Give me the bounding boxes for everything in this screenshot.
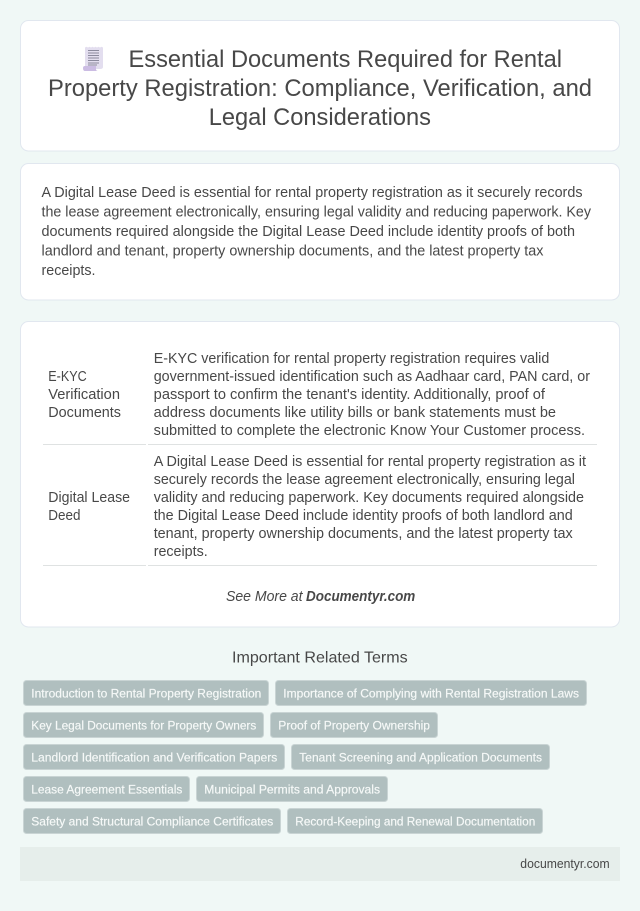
title: Property Registration: Compliance, Verification, and bbox=[48, 75, 592, 102]
tag bbox=[24, 808, 280, 834]
intro text bbox=[42, 185, 592, 279]
row text: E-KYC bbox=[154, 351, 590, 439]
tag: Introduction to Rental Property Registration bbox=[31, 686, 261, 700]
row label: E-KYC bbox=[48, 369, 121, 421]
table row: E-KYC verification documents bbox=[43, 351, 597, 445]
icon: document scroll bbox=[83, 47, 103, 71]
tag: Landlord Identification and Verification Papers bbox=[31, 750, 277, 764]
tag bbox=[24, 776, 190, 802]
row text: Digital Lease Deed: the Digital Lease Deed include identity proofs of both landlord and bbox=[154, 508, 573, 524]
row text: Digital Lease Deed: validity and reducing paperwork. Key documents required alongside bbox=[154, 490, 584, 506]
row text: E-KYC: address documents like utility bills or bank statements must be bbox=[154, 405, 556, 421]
intro text: documents required alongside the Digital Lease Deed include identity proofs of both bbox=[42, 224, 575, 240]
row label: Digital Lease Deed: Digital Lease bbox=[48, 490, 130, 506]
table row: digital lease deed bbox=[43, 454, 597, 566]
title bbox=[48, 46, 592, 131]
row text: Digital Lease Deed: receipts. bbox=[154, 544, 208, 560]
row text: E-KYC: E-KYC verification for rental property registration requires valid bbox=[154, 351, 549, 367]
title: Legal Considerations bbox=[209, 104, 431, 131]
footer bar bbox=[20, 847, 620, 881]
intro text: the lease agreement electronically, ensuring legal validity and reducing paperwork. Key bbox=[42, 204, 592, 220]
row text: E-KYC: passport to confirm the tenant's identity. Additionally, proof of bbox=[154, 387, 546, 403]
row label: Digital Lease Deed bbox=[48, 490, 130, 524]
tag: Record-Keeping and Renewal Documentation bbox=[295, 814, 535, 828]
tag: Tenant Screening and Application Documents bbox=[299, 750, 542, 764]
related term tags bbox=[24, 680, 586, 834]
row text: E-KYC: submitted to complete the electronic Know Your Customer process. bbox=[154, 423, 585, 439]
tag bbox=[24, 744, 284, 770]
footer text: documentyr.com bbox=[520, 857, 610, 871]
title: Essential Documents Required for Rental bbox=[128, 46, 562, 73]
tag: Lease Agreement Essentials bbox=[31, 782, 182, 796]
tag: Municipal Permits and Approvals bbox=[204, 782, 380, 796]
tag bbox=[292, 744, 550, 770]
panel: document table bbox=[20, 322, 620, 627]
panel: title card bbox=[20, 20, 620, 151]
tag bbox=[24, 712, 264, 738]
heading: important related terms: Important Related Terms bbox=[232, 650, 408, 666]
see more link bbox=[226, 589, 415, 605]
tag bbox=[270, 712, 438, 738]
see more link: See More at bbox=[226, 589, 303, 605]
tag: Proof of Property Ownership bbox=[278, 718, 430, 732]
panel: introduction bbox=[20, 164, 620, 300]
tag bbox=[288, 808, 542, 834]
tag bbox=[276, 680, 586, 706]
tag: Key Legal Documents for Property Owners bbox=[31, 718, 256, 732]
row text: Digital Lease Deed bbox=[154, 454, 586, 560]
row text: Digital Lease Deed: tenant, property ownership documents, and the latest property tax bbox=[154, 526, 574, 542]
tag bbox=[24, 680, 268, 706]
row label: E-KYC: E-KYC bbox=[48, 369, 87, 385]
see more link: Documentyr.com bbox=[306, 589, 415, 605]
row text: Digital Lease Deed: securely records the lease agreement electronically, ensuring legal bbox=[154, 472, 575, 488]
row label: E-KYC: Verification bbox=[48, 387, 120, 403]
row label: Digital Lease Deed: Deed bbox=[48, 508, 80, 524]
row label: E-KYC: Documents bbox=[48, 405, 121, 421]
intro text: landlord and tenant, property ownership documents, and the latest property tax bbox=[42, 244, 544, 260]
tag: Safety and Structural Compliance Certificates bbox=[31, 814, 273, 828]
row text: Digital Lease Deed: A Digital Lease Deed is essential for rental property registration as it bbox=[154, 454, 586, 470]
row text: E-KYC: government-issued identification such as Aadhaar card, PAN card, or bbox=[154, 369, 590, 385]
intro text: receipts. bbox=[42, 263, 96, 279]
intro text: A Digital Lease Deed is essential for rental property registration as it securely records bbox=[42, 185, 582, 201]
tag: Importance of Complying with Rental Registration Laws bbox=[283, 686, 579, 700]
tag bbox=[196, 776, 388, 802]
